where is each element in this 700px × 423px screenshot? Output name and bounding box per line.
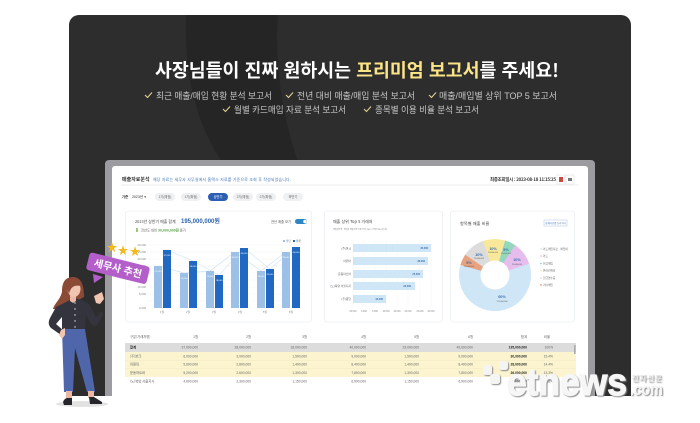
- panel: donut ratio chart: 5%: [503, 248, 509, 252]
- panel: top 5 customers horizontal bars: 10,000: [382, 311, 390, 313]
- row: company 2: 5,600,000: [183, 362, 198, 366]
- row: company 3: 5,200,000: [183, 371, 198, 375]
- panel: sales bar chart: 15,000: [181, 278, 188, 280]
- donut legend: 기타매입: [543, 283, 553, 287]
- table header: 4월: [361, 334, 366, 339]
- panel: donut ratio chart: 상세자료별 보러가기: [545, 221, 566, 225]
- panel: sales bar chart: 40,000: [137, 243, 146, 247]
- sweater: [49, 298, 103, 335]
- period filter: 1기(예정): [159, 194, 171, 199]
- dashboard header: 최종조회일시 : 2023-08-18 11:15:25: [490, 176, 556, 183]
- row: company 1: 1,500,000: [292, 354, 307, 358]
- watermark: etnews logo: .com: [630, 380, 663, 399]
- panel: sales bar chart: 30,000: [137, 257, 146, 261]
- panel: donut ratio chart: 항목별 매출 비율: [460, 220, 489, 227]
- row: company 1: (주)본크: [130, 354, 141, 358]
- panel: top 5 customers horizontal bars: (주)본크: [341, 246, 351, 250]
- row: total: 합계: [130, 344, 136, 350]
- icon: stars: [106, 242, 140, 258]
- panel: sales bar chart: 35,000: [232, 257, 239, 259]
- panel: sales bar chart: 22,000: [155, 271, 162, 273]
- table header: 2월: [246, 334, 251, 339]
- panel: dashboard content: [121, 175, 579, 384]
- panel: donut ratio chart: 117,000,000: [497, 301, 508, 303]
- panel: sales bar chart: 28,000: [190, 266, 197, 268]
- row: company 1: [130, 354, 553, 358]
- panel: top 5 customers horizontal bars: 30,000: [420, 247, 429, 250]
- watermark: etnews logo: [483, 361, 663, 404]
- row: company 1: 9,000,000: [458, 354, 473, 358]
- donut legend: 카드: [543, 254, 548, 258]
- row: company 4: 6,900,000: [458, 380, 473, 384]
- panel: top 5 customers horizontal bars: 20,000: [403, 285, 412, 288]
- icon: stars: ★: [130, 246, 140, 258]
- panel: sales bar chart: 23,000: [267, 274, 274, 276]
- panel: sales bar chart: 6월: [289, 310, 293, 314]
- panel: sales bar chart: 4월: [238, 310, 242, 314]
- panel: top 5 customers horizontal bars: 00,000: [349, 311, 357, 313]
- watermark: etnews logo: etnews: [507, 362, 627, 404]
- panel: donut ratio chart: 10%: [489, 247, 497, 251]
- row: total: 28,000,000: [234, 346, 251, 350]
- row: company 1: 15.4%: [544, 354, 553, 358]
- panel: sales bar chart: 20,000: [137, 271, 146, 275]
- donut legend: 온라인매출: [543, 268, 556, 272]
- panel: donut ratio chart: 10,000,000: [464, 266, 475, 268]
- row: company 4: 11.8%: [544, 380, 553, 384]
- watermark: etnews logo: 전자신문: [632, 373, 662, 384]
- panel: sales bar chart: 15,000: [137, 278, 146, 282]
- panel: sales bar chart: 35,000: [137, 250, 146, 254]
- panel: sales bar chart: 16,000: [258, 276, 265, 278]
- table header: 1월: [193, 334, 198, 339]
- panel: sales bar chart: 1월: [160, 310, 164, 314]
- row: company 2: 1,400,000: [292, 362, 307, 366]
- panel: top 5 customers horizontal bars: 28,000: [417, 260, 426, 263]
- check item: year over year: 전년 대비 매출/매입 분석 보고서: [297, 90, 415, 101]
- panel: sales bar chart: 0,000: [139, 306, 146, 310]
- panel: sales bar chart: 40,000: [293, 252, 300, 254]
- donut legend: 카드매입자료 · 매입세: [543, 247, 568, 251]
- panel: sales bar chart: 전년 매출 보기: [271, 219, 291, 224]
- head and hands: [70, 295, 76, 303]
- row: total: 18,000,000: [290, 346, 307, 350]
- row: company 1: 3,000,000: [236, 354, 251, 358]
- row: company 4: 23,000,000: [510, 380, 527, 384]
- panel: sales bar chart: 16,000: [207, 276, 214, 278]
- panel: donut ratio chart: 60%: [498, 295, 506, 299]
- row: company 2: [130, 362, 553, 366]
- panel: top 5 customers horizontal bars: 25,000: [412, 273, 421, 276]
- table header: 구분(거래처명): [130, 334, 150, 339]
- icon: stars: ★: [106, 242, 118, 254]
- panel: sales bar chart: 3월: [212, 310, 216, 314]
- row: company 2: 1,400,000: [404, 362, 419, 366]
- panel: top 5 customers horizontal bars: 15,000: [393, 311, 401, 313]
- row: company 3: 1,300,000: [292, 371, 307, 375]
- period filter: 기준: [122, 194, 129, 199]
- row: company 4: 1,150,000: [292, 380, 307, 384]
- period filter: 하반기: [289, 194, 297, 199]
- dashboard header: 매출자료분석: [122, 176, 150, 183]
- row: company 2: 14.4%: [544, 362, 553, 366]
- table header: 비율: [544, 334, 550, 339]
- row: total: 40,000,000: [349, 346, 366, 350]
- legs: [62, 329, 95, 392]
- sales table: [125, 334, 576, 384]
- check item: card purchases: 월별 카드매입 자료 분석 보고서: [234, 104, 346, 115]
- row: company 2: 28,000,000: [510, 362, 527, 366]
- panel: top 5 customers horizontal bars: 5,000: [372, 311, 379, 313]
- panel: top 5 customers horizontal bars: 매출 상위 Top 5 거래처: [333, 218, 373, 225]
- row: company 3: 13.3%: [544, 371, 553, 375]
- row: total: 49,000,000: [456, 346, 473, 350]
- panel: top 5 customers horizontal bars: 5,000: [361, 311, 368, 313]
- table header: 3월: [302, 334, 307, 339]
- panel: sales bar chart: 10,000: [137, 285, 146, 289]
- row: company 2: 마원마: [130, 362, 139, 366]
- panel: sales bar chart: 37,000: [164, 255, 171, 257]
- row: total: 100%: [545, 346, 553, 350]
- row: company 3: [130, 370, 553, 375]
- table header: 5월: [414, 334, 419, 339]
- row: company 4: (노)북양 서울지사: [130, 378, 154, 384]
- panel: sales bar chart: 35,000: [283, 257, 290, 259]
- period filter: 2기(확정): [260, 194, 272, 199]
- panel: dark background: [69, 15, 631, 396]
- row: total: [130, 344, 553, 350]
- title: 사장님들이 진짜 원하시는 프리미엄 보고서를 주세요!: [155, 57, 559, 83]
- row: total: 195,000,000: [509, 346, 527, 350]
- row: company 1: 1,500,000: [404, 354, 419, 358]
- period filter: 1기(확정): [185, 194, 197, 199]
- period filter: [122, 193, 303, 201]
- panel: donut ratio chart: 10%: [475, 253, 483, 257]
- row: total: 37,000,000: [181, 346, 198, 350]
- panel: top 5 customers horizontal bars: 운동마트바: [338, 272, 351, 276]
- panel: donut ratio chart: 5%: [466, 261, 472, 265]
- panel: donut ratio chart: 10,000,000: [501, 253, 512, 255]
- row: company 2: 2,800,000: [236, 362, 251, 366]
- panel: sales bar chart: 40,000: [241, 253, 248, 255]
- feature checklist: [145, 90, 557, 115]
- row: company 4: 1,150,000: [404, 380, 419, 384]
- panel: top 5 customers horizontal bars: (노)북양 서울지사: [330, 284, 351, 288]
- panel: top 5 customers horizontal bars: 25,000: [416, 311, 424, 313]
- donut legend: 현금영수증: [543, 276, 556, 280]
- panel: sales bar chart: 2월: [186, 310, 190, 314]
- panel: donut ratio chart: 10%: [513, 258, 521, 262]
- legend: [283, 239, 301, 243]
- row: company 4: 4,600,000: [183, 380, 198, 384]
- panel: donut ratio chart: 20,000,000: [474, 258, 485, 260]
- panel: sales bar chart: [126, 211, 312, 322]
- callout: tax accountant recommendation: [86, 242, 150, 285]
- trend lines: [158, 247, 296, 275]
- row: company 4: 6,900,000: [351, 380, 366, 384]
- logo squares: [483, 361, 508, 384]
- row: company 3: 7,800,000: [458, 371, 473, 375]
- period filter: 2기(예정): [237, 194, 249, 199]
- callout: tax accountant recommendation: 세무사 추천: [93, 254, 144, 281]
- panel: top 5 customers horizontal bars: 마원마: [343, 259, 351, 263]
- dashboard header: 해당 자료는 세무사 사무실에서 홈택스 자료를 기준으로 조회 후 작성되었습니다.: [153, 177, 291, 183]
- row: company 1: 30,000,000: [510, 354, 527, 358]
- panel: sales bar chart: 전년도 대비 30,000,000원 증가: [141, 228, 186, 232]
- row: company 2: 8,400,000: [351, 362, 366, 366]
- row: total: 23,000,000: [402, 346, 419, 350]
- check item: expense ratio: 종목별 이용 비율 분석 보고서: [375, 105, 479, 115]
- row: company 3: 1,300,000: [404, 371, 419, 375]
- row: company 1: 9,000,000: [351, 354, 366, 358]
- table header: [130, 334, 550, 339]
- donut legend: [540, 247, 568, 287]
- panel: top 5 customers horizontal bars: 매출합산액 : 매입과 매출금액 기준 상위 Top 5 거래처 표시입니다: [333, 227, 388, 231]
- panel: sales bar chart: 25,000: [137, 264, 146, 268]
- row: company 4: [130, 378, 553, 384]
- panel: donut ratio chart: 20,000,000: [488, 252, 499, 254]
- icon: stars: ★: [118, 245, 128, 257]
- period filter: 2023년 ▾: [132, 194, 146, 199]
- panel: top 5 customers horizontal bars: 20,000: [404, 311, 412, 313]
- panel: donut ratio chart: [450, 211, 574, 322]
- row: company 3: 운동마트바: [130, 370, 145, 375]
- dashboard header: [121, 175, 579, 185]
- donut legend: 현금매입: [543, 262, 553, 266]
- row: company 3: 7,800,000: [351, 371, 366, 375]
- panel: sales bar chart: 5월: [263, 310, 267, 314]
- legend: 올해: [296, 239, 301, 243]
- row: company 1: 6,000,000: [183, 354, 198, 358]
- panel: sales bar chart: 18,000: [216, 280, 223, 282]
- panel: top 5 customers horizontal bars: 10,000: [375, 298, 384, 301]
- panel: monitor frame: [69, 160, 631, 423]
- table header: 6월: [468, 334, 473, 339]
- donut: [460, 240, 530, 310]
- row: company 3: 26,000,000: [510, 371, 527, 375]
- row: company 4: 2,300,000: [236, 380, 251, 384]
- panel: top 5 customers horizontal bars: [324, 211, 442, 322]
- period filter: 상반기: [214, 194, 222, 199]
- panel: sales bar chart: 2023년 상반기 매출 합계: [135, 219, 176, 225]
- panel: donut ratio chart: 20,000,000: [512, 264, 523, 266]
- check item: recent status: 최근 매출/매입 현황 분석 보고서: [156, 90, 272, 101]
- legend: 작년: [286, 239, 291, 243]
- panel: sales bar chart: 5,000: [139, 292, 146, 296]
- panel: top 5 customers horizontal bars: (주)몽달: [341, 297, 351, 301]
- row: company 3: 2,600,000: [236, 371, 251, 375]
- table header: 합계: [521, 334, 527, 339]
- panel: top 5 customers horizontal bars: 30,000: [427, 311, 435, 313]
- check item: top 5: 매출/매입별 상위 TOP 5 보고서: [439, 90, 557, 101]
- illustration: woman: [49, 277, 108, 407]
- panel: sales bar chart: 195,000,000원: [181, 217, 220, 225]
- row: company 2: 8,400,000: [458, 362, 473, 366]
